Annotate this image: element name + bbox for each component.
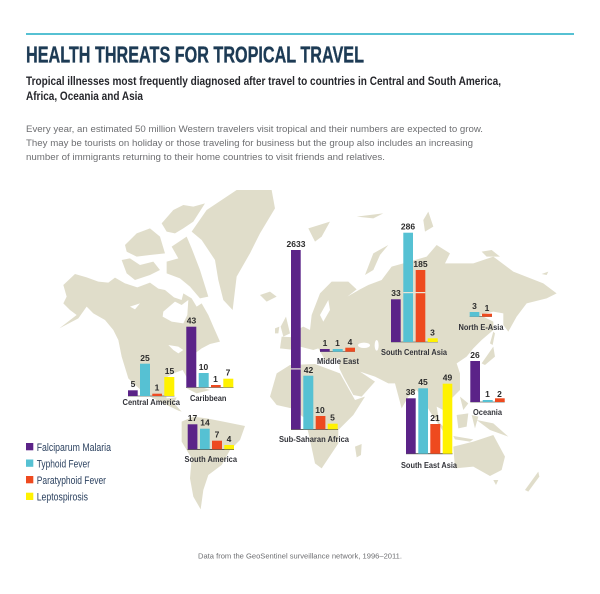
chart: Oceania: 2 bbox=[497, 389, 502, 399]
chart: South Central Asia: 185 bbox=[413, 259, 428, 269]
intro text: Every year, an estimated 50 million Western travelers visit tropical and their numbers are expected to grow. bbox=[26, 124, 483, 135]
chart: Caribbean bbox=[186, 316, 234, 403]
map: North America and Greenland bbox=[59, 190, 277, 412]
chart: Middle East: 1 bbox=[323, 338, 328, 348]
label: South East Asia: South East Asia bbox=[401, 460, 457, 470]
top rule bbox=[26, 33, 574, 35]
chart: South Central Asia: 33 bbox=[391, 288, 401, 298]
legend: Falciparum Malaria bbox=[37, 442, 112, 454]
chart: South East Asia: 38 bbox=[406, 387, 415, 397]
legend bbox=[26, 442, 112, 504]
chart: South Central Asia bbox=[381, 222, 447, 357]
chart: Caribbean: 43 bbox=[187, 316, 196, 326]
intro text: number of immigrants returning to their home countries to visit friends and relatives. bbox=[26, 152, 385, 163]
label: North E-Asia: North E-Asia bbox=[458, 322, 504, 332]
chart: Middle East: 4 bbox=[348, 337, 353, 347]
legend: Paratyphoid Fever bbox=[37, 475, 106, 487]
label: Oceania: Oceania bbox=[473, 407, 502, 417]
label: Caribbean: Caribbean bbox=[190, 393, 226, 403]
chart: South America: 17 bbox=[188, 413, 197, 423]
chart: Middle East bbox=[317, 337, 359, 366]
chart: Sub-Saharan Africa: 10 bbox=[315, 405, 325, 415]
chart: Caribbean: 10 bbox=[199, 362, 208, 372]
intro text: They may be tourists on holiday or those traveling for business but the group also includes an increasing bbox=[26, 138, 473, 149]
chart: Middle East: 1 bbox=[335, 338, 340, 348]
label: Sub-Saharan Africa: Sub-Saharan Africa bbox=[279, 434, 349, 444]
chart: South East Asia: 49 bbox=[443, 372, 452, 382]
intro text bbox=[26, 124, 483, 163]
map: Africa and Oceania bbox=[270, 364, 539, 492]
world map bbox=[59, 190, 557, 509]
source note: Data from the GeoSentinel surveillance network, 1996–2011. bbox=[198, 552, 402, 560]
chart: North E-Asia bbox=[458, 301, 504, 332]
legend: Typhoid Fever bbox=[37, 458, 90, 470]
map: Eurasia bbox=[275, 212, 557, 427]
subtitle bbox=[26, 74, 501, 103]
subtitle: Tropical illnesses most frequently diagnosed after travel to countries in Central and South America, bbox=[26, 74, 501, 88]
chart: Oceania: 1 bbox=[485, 389, 490, 399]
chart: Central America: 1 bbox=[155, 382, 160, 392]
chart: North E-Asia: 1 bbox=[485, 303, 490, 313]
chart: Central America: 5 bbox=[131, 379, 136, 389]
legend: Leptospirosis bbox=[37, 492, 88, 504]
chart: South America bbox=[184, 413, 237, 464]
chart: South East Asia: 45 bbox=[418, 377, 428, 387]
chart: Central America: 25 bbox=[140, 353, 150, 363]
chart: Oceania bbox=[470, 350, 505, 417]
chart: Sub-Saharan Africa: 2633 bbox=[287, 239, 306, 249]
chart: Sub-Saharan Africa: 42 bbox=[304, 365, 313, 375]
chart: Central America: 15 bbox=[165, 366, 174, 376]
chart: South America: 7 bbox=[215, 430, 220, 440]
chart: Sub-Saharan Africa bbox=[279, 239, 349, 444]
chart: North E-Asia: 3 bbox=[472, 301, 477, 311]
chart: South America: 14 bbox=[200, 418, 210, 428]
title: HEALTH THREATS FOR TROPICAL TRAVEL bbox=[26, 42, 364, 68]
chart: South Central Asia: 3 bbox=[430, 328, 435, 338]
label: South Central Asia: South Central Asia bbox=[381, 347, 447, 357]
label: Central America: Central America bbox=[122, 397, 180, 407]
map: South America bbox=[182, 417, 245, 509]
subtitle: Africa, Oceania and Asia bbox=[26, 89, 143, 103]
chart: Central America bbox=[122, 353, 180, 407]
chart: Caribbean: 7 bbox=[226, 368, 231, 378]
chart: Caribbean: 1 bbox=[213, 374, 218, 384]
label: South America: South America bbox=[184, 454, 237, 464]
chart: South America: 4 bbox=[227, 434, 232, 444]
chart: South East Asia: 21 bbox=[430, 413, 440, 423]
chart: Oceania: 26 bbox=[470, 350, 480, 360]
chart: Sub-Saharan Africa: 5 bbox=[330, 412, 335, 422]
chart: South Central Asia: 286 bbox=[401, 222, 415, 232]
chart: South East Asia bbox=[401, 372, 457, 470]
label: Middle East: Middle East bbox=[317, 356, 359, 366]
